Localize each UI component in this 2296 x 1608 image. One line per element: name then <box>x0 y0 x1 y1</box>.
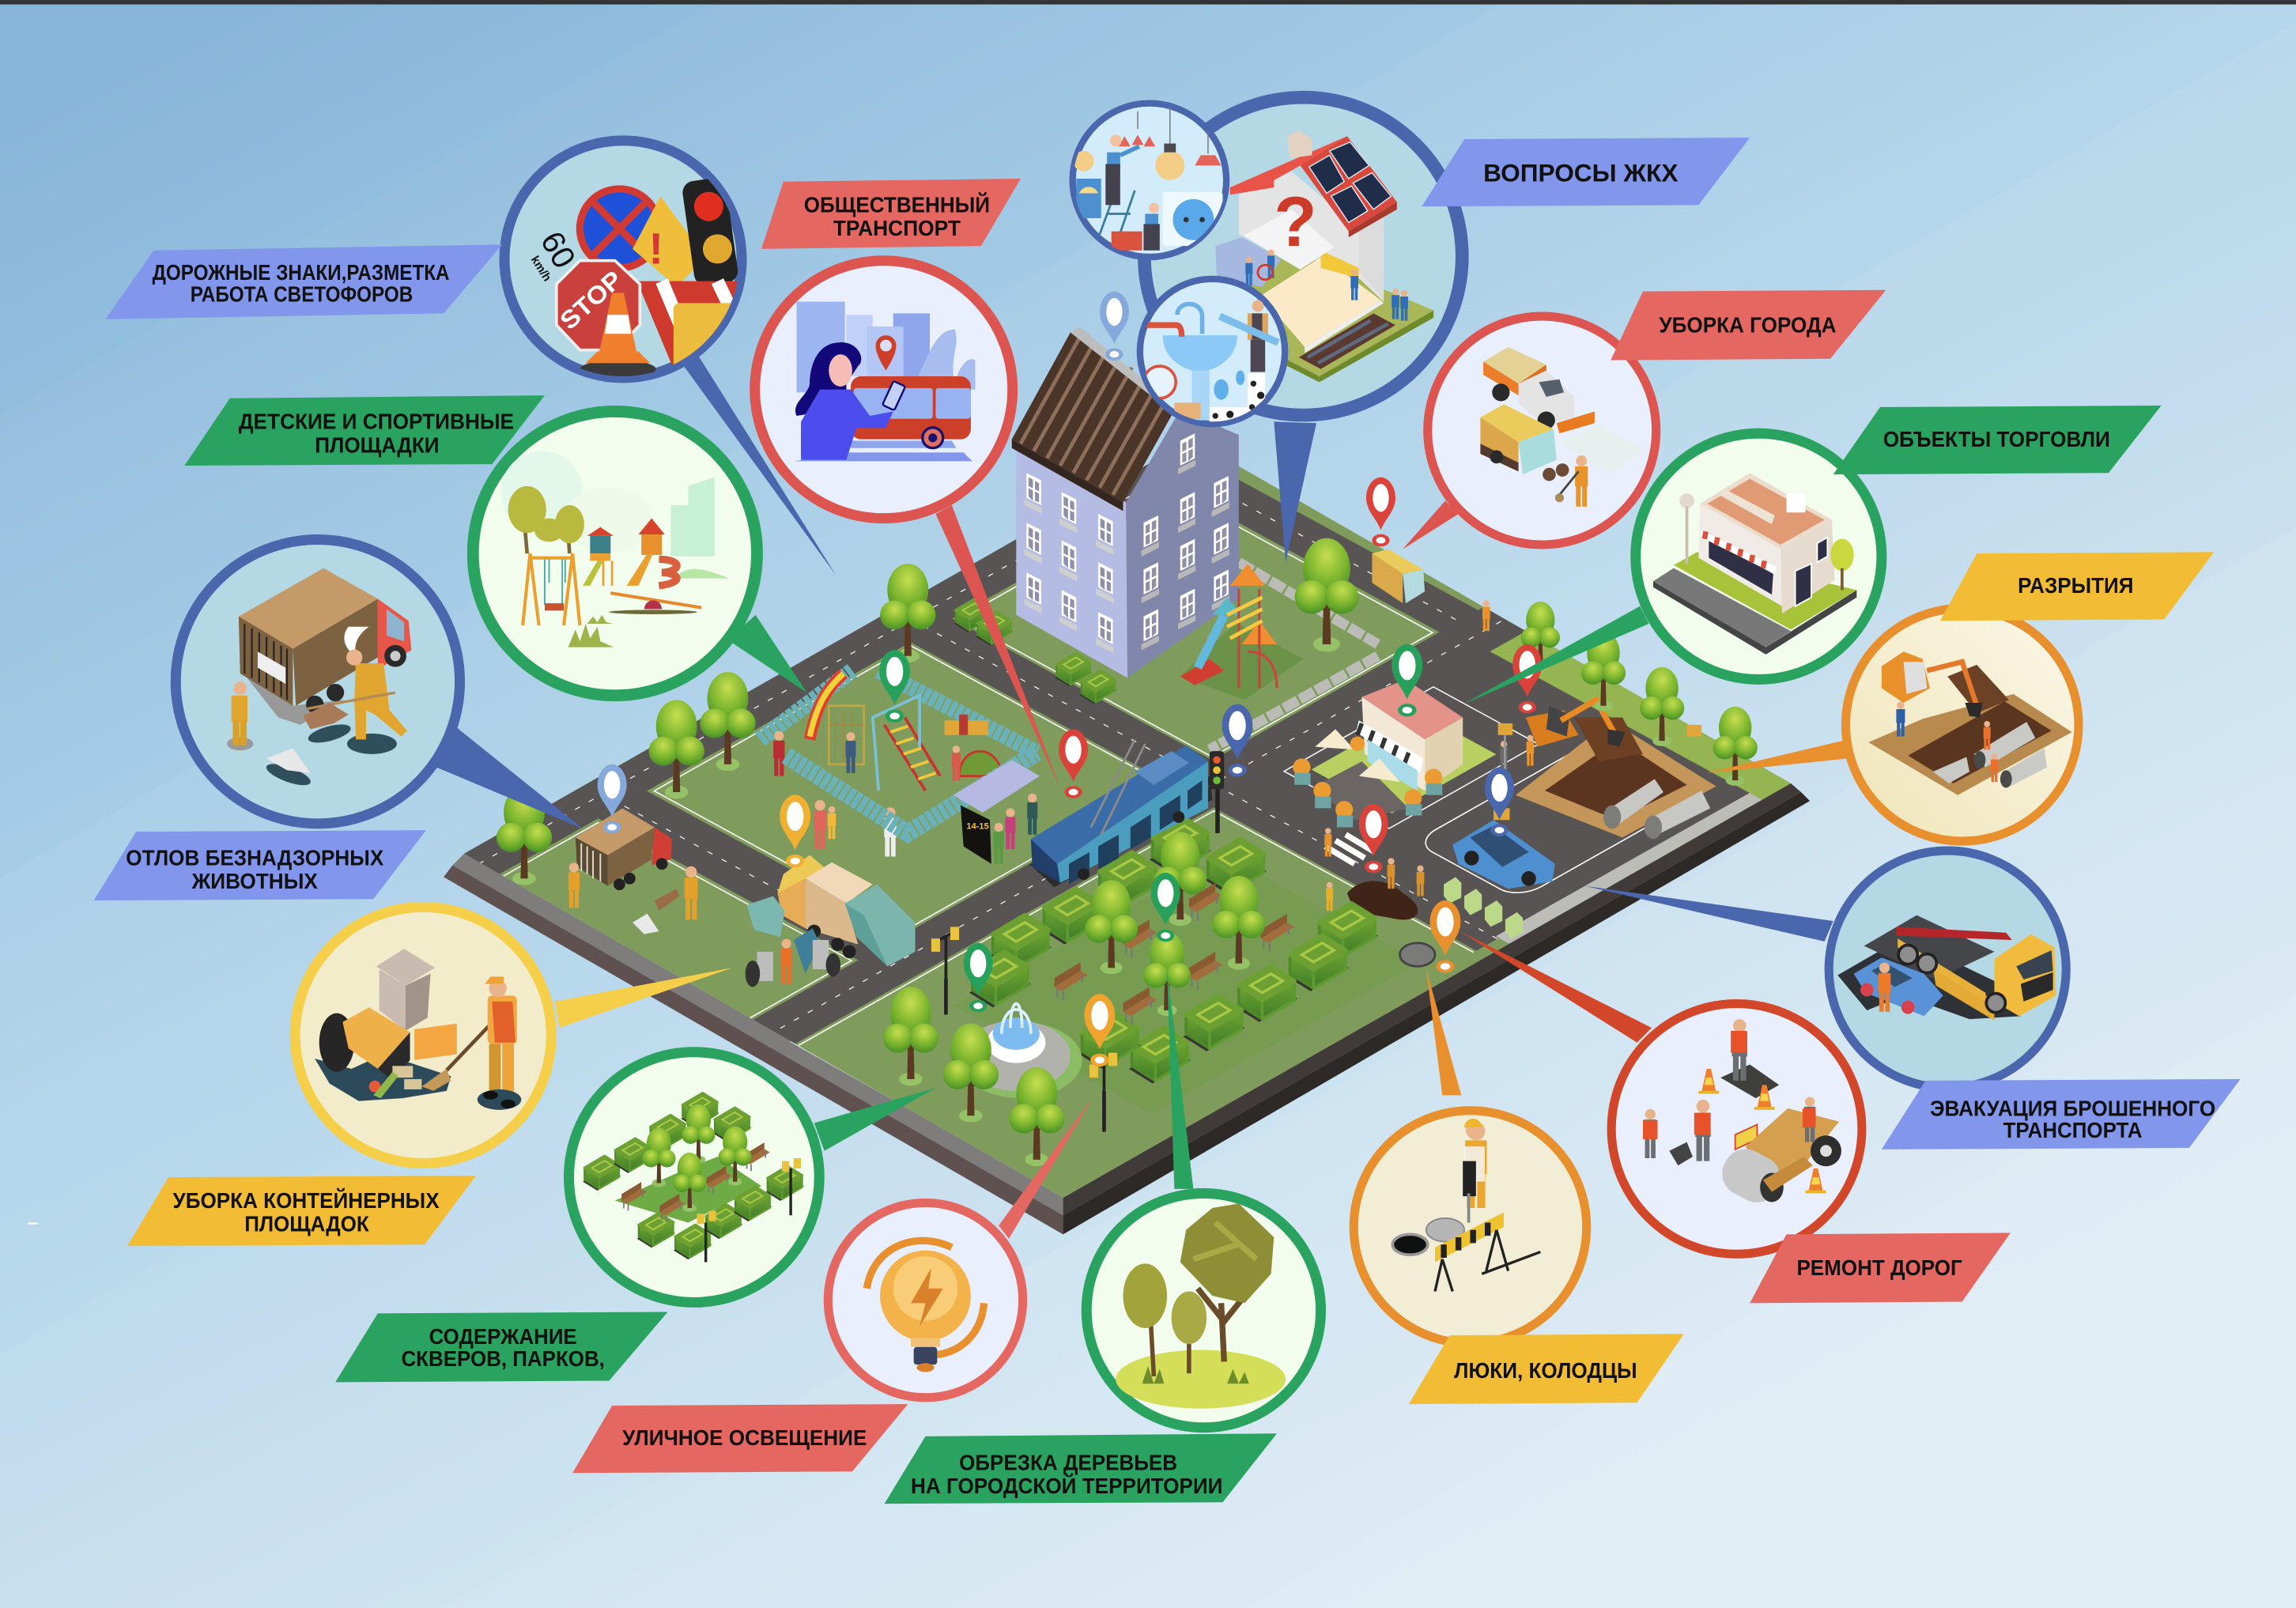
label: road signs: РАБОТА СВЕТОФОРОВ <box>191 282 413 307</box>
label: playgrounds <box>184 395 545 466</box>
callout: towing <box>1584 851 2066 1088</box>
label: public transport: ТРАНСПОРТ <box>833 216 961 240</box>
label: excavations <box>1940 552 2214 621</box>
label: parks: СКВЕРОВ, ПАРКОВ, <box>401 1346 605 1371</box>
label: playgrounds: ДЕТСКИЕ И СПОРТИВНЫЕ <box>239 410 514 434</box>
label: stray animals <box>94 830 426 900</box>
sub-circle: repairs <box>1073 103 1226 257</box>
label: trade <box>1833 406 2162 474</box>
excavation site <box>1516 700 1716 839</box>
bus stop <box>954 760 1040 864</box>
icon: road signs: ! <box>648 224 663 273</box>
label: container sites: ПЛОЩАДОК <box>244 1212 369 1236</box>
label: container sites <box>127 1176 476 1246</box>
label: road signs <box>105 244 502 319</box>
label: street lighting <box>572 1404 908 1473</box>
callout: city cleaning <box>1403 316 1656 549</box>
icon: trench with pipes <box>1868 651 2072 795</box>
garbage truck and bins <box>746 855 916 987</box>
bus stop: 14-15 <box>966 821 989 831</box>
manhole <box>1400 943 1435 966</box>
park front trees and lamps <box>883 927 1117 1166</box>
label: public transport: ОБЩЕСТВЕННЫЙ <box>804 193 990 217</box>
animal catching truck <box>568 808 698 934</box>
label: manholes: ЛЮКИ, КОЛОДЦЫ <box>1454 1358 1637 1383</box>
label: street lighting: УЛИЧНОЕ ОСВЕЩЕНИЕ <box>622 1425 867 1450</box>
label: parks <box>335 1312 668 1382</box>
cafe <box>1293 679 1463 827</box>
construction workers and lamps by the pit <box>1494 723 1701 820</box>
callout: stray animals <box>176 540 583 829</box>
callout: trade objects <box>1463 433 1882 704</box>
callout: housing questions <box>1073 97 1462 562</box>
label: towing <box>1882 1079 2241 1149</box>
icon: animal catchers and truck <box>227 568 411 790</box>
icon: road signs: km/h <box>528 254 553 284</box>
label: housing <box>1422 138 1750 206</box>
icon: shop <box>1653 473 1856 655</box>
icon: light bulb <box>867 1240 984 1372</box>
label: tree trimming: НА ГОРОДСКОЙ ТЕРРИТОРИИ <box>911 1474 1222 1498</box>
callout: street lighting <box>828 1098 1093 1398</box>
label: manholes <box>1409 1334 1684 1404</box>
fence around building block <box>1210 562 1378 749</box>
upper-left trees <box>497 564 935 885</box>
icon: passenger with phone and bus <box>794 302 975 461</box>
callout: manholes <box>1354 969 1587 1343</box>
callout: tree trimming <box>1086 969 1321 1428</box>
label: road repair: РЕМОНТ ДОРОГ <box>1796 1255 1962 1280</box>
icon: road crew with roller <box>1643 1019 1841 1210</box>
right-edge trees <box>1521 602 1758 786</box>
icon: cutaway house: ? <box>1274 183 1317 261</box>
location pins <box>598 292 1542 1066</box>
callout: playgrounds <box>473 411 806 696</box>
icon: cutaway house <box>1215 130 1434 383</box>
label: road signs: ДОРОЖНЫЕ ЗНАКИ,РАЗМЕТКА <box>153 260 450 285</box>
callout: public transport <box>755 261 1060 787</box>
callout: road repair <box>1460 931 1862 1254</box>
label: housing: ВОПРОСЫ ЖКХ <box>1483 160 1678 187</box>
fountain <box>959 1004 1082 1098</box>
label: stray animals: ОТЛОВ БЕЗНАДЗОРНЫХ <box>126 846 384 870</box>
bushes near building <box>954 599 1116 704</box>
callout: road signs <box>504 141 836 576</box>
isometric city board <box>444 327 1810 1234</box>
label: trade: ОБЪЕКТЫ ТОРГОВЛИ <box>1883 427 2110 451</box>
blue car <box>1452 820 1555 889</box>
label: towing: ТРАНСПОРТА <box>2003 1118 2143 1142</box>
icon: cleaning a container site <box>315 949 521 1110</box>
label: stray animals: ЖИВОТНЫХ <box>191 869 318 893</box>
icon: tow truck <box>1837 915 2056 1021</box>
label: public transport <box>761 179 1021 249</box>
icon: road signs <box>528 176 747 378</box>
parking bollards <box>1444 877 1523 938</box>
icon: dump truck and sweeper <box>1480 347 1645 507</box>
sub-circle: plumbing <box>1139 279 1285 424</box>
icon: swings and seesaw <box>500 451 729 647</box>
label: city cleaning <box>1611 290 1886 360</box>
callout: parks upkeep <box>569 1052 935 1302</box>
label: towing: ЭВАКУАЦИЯ БРОШЕННОГО <box>1930 1096 2215 1120</box>
label: excavations: РАЗРЫТИЯ <box>2018 573 2133 598</box>
ground, roads and markings <box>445 440 1810 1198</box>
label: city cleaning: УБОРКА ГОРОДА <box>1659 312 1836 337</box>
road sweeper on road <box>1372 549 1490 631</box>
trolleybus <box>1029 739 1212 887</box>
residential building <box>1012 327 1239 678</box>
label: tree trimming: ОБРЕЗКА ДЕРЕВЬЕВ <box>959 1450 1177 1474</box>
icon: road signs: 60 <box>534 225 583 274</box>
yard playground <box>1180 564 1303 700</box>
kids playground with fence <box>760 670 1037 856</box>
label: road repair <box>1750 1232 2011 1303</box>
icon: worker and open manhole <box>1392 1119 1540 1292</box>
board side faces <box>444 783 1810 1234</box>
label: playgrounds: ПЛОЩАДКИ <box>315 432 440 457</box>
road works and crosswalk <box>1324 828 1424 919</box>
park trees benches and bushes <box>969 818 1378 1084</box>
big tree by the building <box>1294 538 1358 652</box>
label: container sites: УБОРКА КОНТЕЙНЕРНЫХ <box>173 1188 440 1213</box>
label: parks: СОДЕРЖАНИЕ <box>429 1324 577 1349</box>
icon: miniature park <box>583 1093 804 1263</box>
callout: excavations <box>1706 609 2079 841</box>
label: tree trimming <box>885 1433 1277 1504</box>
icon: trimmed trees <box>1116 1203 1286 1409</box>
traffic light <box>1210 751 1224 833</box>
callout: container sites <box>295 907 732 1163</box>
icon: road signs: STOP <box>555 266 628 335</box>
